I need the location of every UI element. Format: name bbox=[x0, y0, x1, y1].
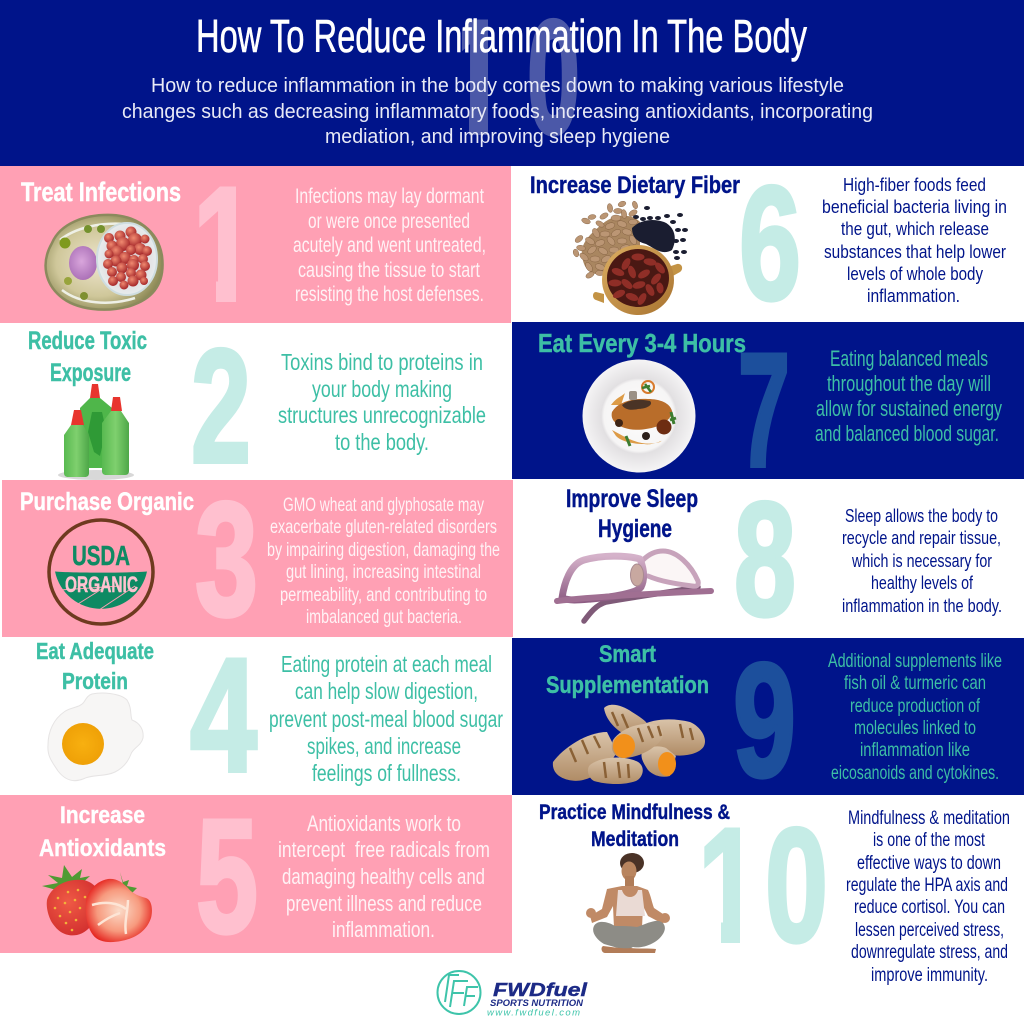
icon: turmeric root bbox=[553, 705, 705, 784]
body text: gut lining, increasing intestinal bbox=[286, 561, 481, 583]
body text: the gut, which release bbox=[841, 218, 989, 239]
body text bbox=[815, 346, 1002, 446]
logo: FWDfuel: www.fwdfuel.com bbox=[487, 1008, 580, 1018]
panel 8: improve sleep hygiene bbox=[557, 469, 1002, 650]
heading: Supplementation bbox=[546, 672, 709, 699]
icon: beans in bowl bbox=[572, 200, 688, 315]
panel 6: increase dietary fiber bbox=[530, 153, 1007, 334]
icon: USDA organic seal bbox=[49, 520, 153, 624]
heading: Increase bbox=[60, 802, 145, 829]
number 6: 6 bbox=[739, 153, 801, 334]
heading: Increase Dietary Fiber bbox=[530, 172, 740, 199]
body text: prevent illness and reduce bbox=[286, 891, 482, 916]
number 10 bbox=[704, 826, 825, 945]
body text: feelings of fullness. bbox=[312, 760, 461, 786]
body text bbox=[842, 505, 1002, 616]
icon: USDA organic seal: USDA bbox=[72, 540, 130, 571]
heading bbox=[566, 485, 698, 543]
heading: Practice Mindfulness & bbox=[539, 801, 730, 824]
heading: Smart bbox=[599, 641, 656, 668]
heading bbox=[546, 641, 709, 699]
body text: improve immunity. bbox=[871, 964, 988, 986]
panel 10: practice mindfulness and meditation bbox=[539, 795, 1010, 986]
intro text: mediation, and improving sleep hygiene bbox=[325, 126, 670, 148]
number 3: 3 bbox=[195, 469, 258, 650]
panel 9: smart supplementation bbox=[512, 630, 1024, 811]
body text bbox=[846, 807, 1010, 986]
body text bbox=[828, 650, 1002, 784]
number 10: 1 bbox=[698, 795, 761, 976]
heading: Eat Adequate bbox=[36, 638, 154, 664]
number 5: 5 bbox=[196, 786, 258, 967]
body text bbox=[269, 651, 503, 786]
panel 7: eat every 3-4 hours bbox=[512, 320, 1024, 501]
body text: acutely and went untreated, bbox=[293, 234, 486, 257]
body text: Infections may lay dormant bbox=[295, 185, 484, 208]
body text: by impairing digestion, damaging the bbox=[267, 539, 500, 561]
body text: High-fiber foods feed bbox=[843, 174, 986, 195]
heading bbox=[539, 801, 730, 851]
body text: spikes, and increase bbox=[307, 733, 461, 759]
body text: resisting the host defenses. bbox=[295, 283, 484, 306]
body text bbox=[278, 349, 486, 455]
panel 4: eat adequate protein bbox=[36, 625, 503, 806]
body text: molecules linked to bbox=[854, 717, 976, 739]
body text: is one of the most bbox=[873, 829, 985, 851]
heading: Meditation bbox=[591, 828, 679, 851]
body text: Toxins bind to proteins in bbox=[281, 349, 483, 375]
body text: your body making bbox=[312, 376, 452, 402]
body text: reduce production of bbox=[850, 695, 980, 717]
logo: FWDfuel: FWDfuel bbox=[493, 979, 588, 1000]
heading: Purchase Organic bbox=[20, 488, 194, 516]
logo: FWDfuel bbox=[438, 971, 588, 1018]
heading: Exposure bbox=[50, 359, 131, 387]
intro text bbox=[122, 75, 873, 148]
heading: Treat Infections bbox=[21, 177, 181, 207]
body text bbox=[267, 494, 500, 628]
heading bbox=[36, 638, 154, 694]
body text: imbalanced gut bacteria. bbox=[306, 606, 462, 628]
body text: intercept free radicals from bbox=[278, 837, 490, 862]
body text: inflammation. bbox=[867, 285, 960, 306]
body text: prevent post-meal blood sugar bbox=[269, 706, 503, 732]
intro text: changes such as decreasing inflammatory foods, increasing antioxidants, incorporating bbox=[122, 101, 873, 123]
icon: USDA organic seal: ORGANIC bbox=[65, 572, 138, 597]
icon: strawberries bbox=[42, 865, 152, 942]
body text: inflammation like bbox=[860, 739, 970, 761]
number 2: 2 bbox=[191, 316, 251, 497]
body text: GMO wheat and glyphosate may bbox=[283, 494, 484, 516]
icon: glasses bbox=[557, 551, 711, 621]
black beans bbox=[632, 206, 688, 260]
intro text: How to reduce inflammation in the body comes down to making various lifestyle bbox=[151, 75, 844, 97]
panel 3: purchase organic bbox=[2, 469, 513, 650]
panel: header bbox=[0, 0, 1024, 168]
kidney beans bbox=[608, 254, 667, 306]
body text: inflammation. bbox=[332, 917, 435, 942]
body text: healthy levels of bbox=[871, 572, 974, 593]
body text: causing the tissue to start bbox=[298, 259, 480, 282]
body text: Antioxidants work to bbox=[307, 811, 461, 836]
heading: Eat Every 3-4 Hours bbox=[538, 328, 746, 358]
panel 1: treat infections bbox=[0, 166, 511, 323]
body text: to the body. bbox=[335, 429, 429, 455]
panel 5: increase antioxidants bbox=[0, 786, 512, 967]
number 7: 7 bbox=[738, 320, 790, 501]
big number 10 in header bbox=[462, 18, 578, 136]
icon: green bottles bbox=[58, 384, 134, 480]
heading bbox=[28, 327, 147, 387]
heading: Hygiene bbox=[598, 515, 672, 543]
number 4: 4 bbox=[190, 625, 257, 806]
body text: structures unrecognizable bbox=[278, 402, 486, 428]
icon: fried egg bbox=[48, 693, 143, 781]
heading bbox=[39, 802, 166, 862]
icon: infected cell bbox=[46, 215, 163, 310]
body text: damaging healthy cells and bbox=[282, 864, 485, 889]
logo: FWDfuel: SPORTS NUTRITION bbox=[490, 998, 584, 1009]
number 1: 1 bbox=[193, 154, 256, 335]
body text: exacerbate gluten-related disorders bbox=[270, 516, 497, 538]
body text bbox=[293, 185, 486, 306]
body text: or were once presented bbox=[308, 210, 470, 233]
body text: levels of whole body bbox=[847, 263, 984, 284]
number 9: 9 bbox=[733, 630, 796, 811]
heading: Reduce Toxic bbox=[28, 327, 147, 355]
icon: plate of food bbox=[582, 360, 696, 472]
heading: Antioxidants bbox=[39, 835, 166, 862]
body text bbox=[278, 811, 490, 942]
heading: Protein bbox=[62, 668, 128, 694]
body text: Eating protein at each meal bbox=[281, 651, 492, 677]
body text bbox=[822, 174, 1007, 306]
bowl bbox=[593, 264, 682, 303]
number 8: 8 bbox=[734, 469, 796, 650]
icon: woman meditating bbox=[586, 853, 670, 953]
number 10: 0 bbox=[765, 795, 828, 976]
panel 2: reduce toxic exposure bbox=[28, 316, 486, 497]
brown beans bbox=[572, 200, 639, 280]
heading: Improve Sleep bbox=[566, 485, 698, 513]
body text: can help slow digestion, bbox=[295, 678, 478, 704]
body text: permeability, and contributing to bbox=[280, 584, 487, 606]
